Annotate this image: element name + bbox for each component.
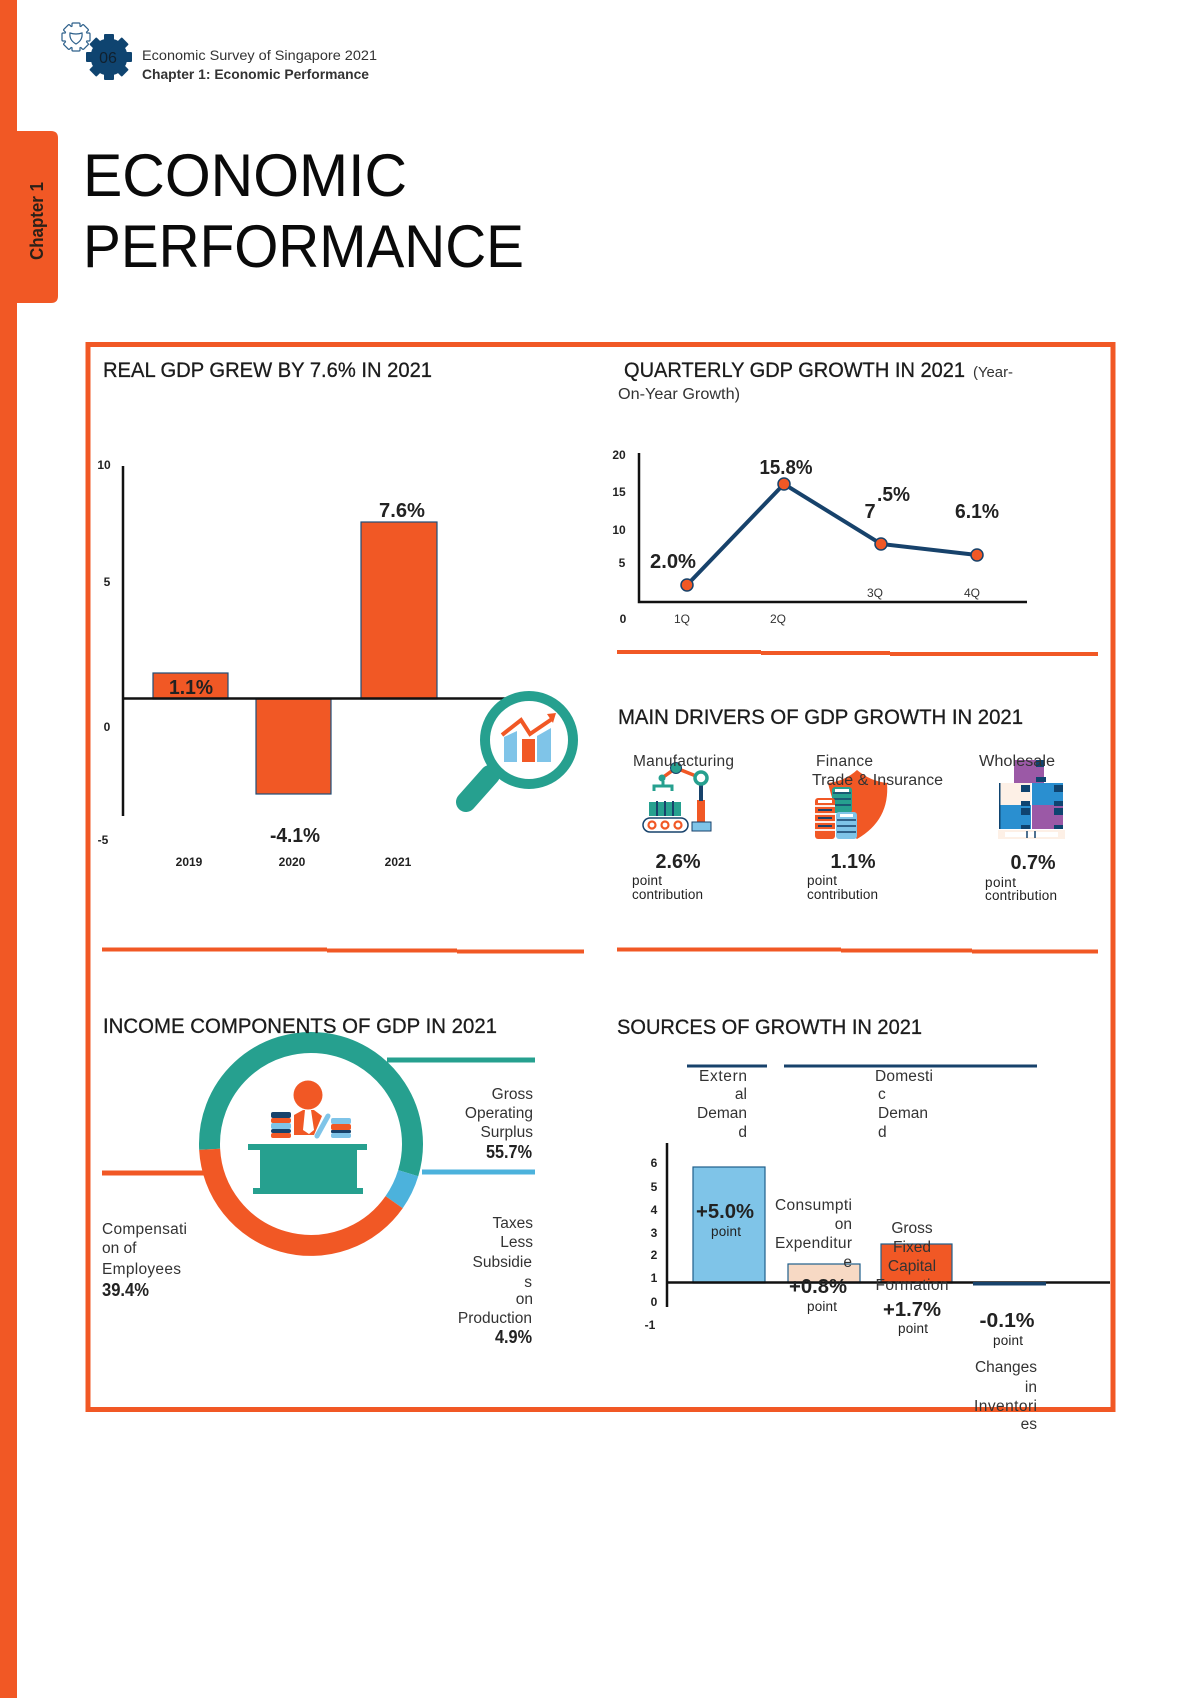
driver: finance and insurance: contribution	[807, 887, 878, 902]
panel: main drivers	[618, 706, 1065, 903]
line chart: quarterly growth: 7	[864, 501, 876, 523]
icon: stacked boxes on pallet	[998, 760, 1065, 839]
icon: gears with chapter number	[62, 23, 132, 80]
line chart: quarterly growth: 2.0%	[650, 551, 696, 573]
heading: income components: INCOME COMPONENTS OF GDP IN 2021	[103, 1015, 497, 1038]
line chart: quarterly growth: .5%	[877, 484, 910, 506]
label: gross operating surplus	[465, 1086, 533, 1162]
line chart: quarterly growth: 3Q	[867, 586, 883, 600]
panel: quarterly GDP	[612, 359, 1027, 626]
bar chart: annual GDP growth: 7.6%	[379, 500, 425, 522]
header text	[142, 47, 377, 82]
label: changes in inventories: -0.1%	[980, 1310, 1035, 1332]
chapter tab: Chapter 1	[27, 182, 47, 260]
label: taxes less subsidies: Less	[500, 1234, 533, 1251]
bar chart: annual GDP growth: -5	[98, 833, 109, 847]
bar chart: annual GDP growth: 2020	[279, 855, 306, 869]
bar chart: annual GDP growth: 0	[104, 720, 111, 734]
value: external demand: point	[711, 1224, 741, 1239]
label: consumption expenditure: +0.8%	[789, 1276, 847, 1298]
icon: magnifying glass with chart	[466, 696, 573, 802]
group label: external demand: al	[735, 1086, 747, 1103]
label: changes in inventories: point	[993, 1333, 1023, 1348]
value: external demand	[696, 1201, 754, 1239]
driver: wholesale: Wholesale	[979, 753, 1055, 770]
label: changes in inventories: in	[1025, 1379, 1037, 1396]
value: external demand: +5.0%	[696, 1201, 754, 1223]
line chart: quarterly growth: 15	[612, 485, 626, 499]
driver: wholesale: 0.7%	[1010, 852, 1056, 874]
bar chart: growth sources: 3	[651, 1226, 658, 1240]
driver: manufacturing: 2.6%	[656, 851, 701, 873]
group label: domestic demand: d	[878, 1124, 887, 1141]
heading: sources of growth: SOURCES OF GROWTH IN 2021	[617, 1016, 922, 1039]
divider right top	[617, 650, 1098, 656]
label: taxes less subsidies: 4.9%	[495, 1327, 532, 1347]
panel: real GDP	[97, 359, 573, 869]
line chart: quarterly growth: 4Q	[964, 586, 980, 600]
label: consumption expenditure: Expenditur	[775, 1235, 852, 1252]
driver: finance and insurance: Finance	[816, 753, 873, 770]
header text: Economic Survey of Singapore 2021	[142, 47, 377, 63]
divider left top	[102, 948, 584, 954]
label: compensation of employees: Compensati	[102, 1221, 187, 1238]
label: changes in inventories: es	[1021, 1416, 1037, 1433]
bar chart: annual GDP growth: 1.1%	[169, 677, 213, 699]
title: PERFORMANCE	[83, 213, 524, 280]
label: taxes less subsidies: on	[516, 1291, 533, 1308]
label: consumption expenditure: on	[835, 1216, 852, 1233]
label: gross fixed capital formation: Formation	[876, 1277, 948, 1294]
label: gross fixed capital formation: Capital	[888, 1258, 936, 1275]
icon: person at desk	[248, 1080, 367, 1194]
title	[83, 142, 524, 280]
orange sidebar	[0, 0, 17, 1698]
label: consumption expenditure	[775, 1197, 852, 1314]
label: compensation of employees	[102, 1221, 187, 1300]
bar chart: growth sources: 1	[651, 1271, 658, 1285]
label: consumption expenditure: Consumpti	[775, 1197, 852, 1214]
label: changes in inventories: Inventori	[974, 1398, 1037, 1415]
label: consumption expenditure: e	[843, 1254, 852, 1271]
label: compensation of employees: Employees	[102, 1261, 181, 1278]
leader lines	[102, 1058, 535, 1176]
line chart: quarterly growth: 1Q	[674, 612, 690, 626]
bar chart: growth sources: -1	[645, 1318, 656, 1332]
driver: manufacturing: contribution	[632, 887, 703, 902]
icon: factory robot arm	[643, 762, 711, 832]
bar chart: growth sources: 5	[651, 1180, 658, 1194]
label: taxes less subsidies: s	[524, 1274, 532, 1291]
bar chart: growth sources: 2	[651, 1248, 658, 1262]
panel: sources of growth	[617, 1016, 1110, 1433]
group label: external demand: d	[738, 1124, 747, 1141]
label: taxes less subsidies: Production	[458, 1310, 532, 1327]
driver: finance and insurance: 1.1%	[830, 851, 876, 873]
bar chart: annual GDP growth: -4.1%	[270, 825, 320, 847]
driver: wholesale: contribution	[985, 888, 1057, 903]
bar chart: annual GDP growth: 2019	[176, 855, 203, 869]
label: gross operating surplus: 55.7%	[486, 1142, 532, 1162]
bar chart: annual GDP growth	[97, 458, 510, 869]
bar chart: growth sources: 6	[651, 1156, 658, 1170]
heading: main drivers: MAIN DRIVERS OF GDP GROWTH IN 2021	[618, 706, 1023, 729]
driver: manufacturing: point	[632, 873, 662, 888]
heading: quarterly GDP: (Year-	[973, 365, 1013, 381]
group label: external demand: Extern	[699, 1068, 747, 1085]
label: gross operating surplus: Surplus	[480, 1124, 533, 1141]
panel frame	[88, 344, 1113, 1410]
bar chart: annual GDP growth: 10	[97, 458, 111, 472]
label: consumption expenditure: point	[807, 1299, 837, 1314]
title: ECONOMIC	[83, 142, 407, 209]
label: gross fixed capital formation: Gross	[891, 1220, 933, 1237]
line chart: quarterly growth: 15.8%	[760, 457, 813, 479]
driver: finance and insurance	[807, 753, 943, 902]
label: taxes less subsidies	[458, 1215, 533, 1347]
bar chart: growth sources: 4	[651, 1203, 658, 1217]
icon: gears with chapter number: 06	[99, 50, 117, 67]
line chart: quarterly growth: 10	[612, 523, 626, 537]
label: taxes less subsidies: Subsidie	[473, 1254, 532, 1271]
line chart: quarterly growth	[612, 448, 1027, 626]
bar chart: annual GDP growth: 2021	[385, 855, 412, 869]
heading: quarterly GDP	[618, 359, 1013, 403]
donut chart: income shares	[209, 1042, 412, 1245]
chapter tab	[0, 131, 58, 303]
line chart: quarterly growth: 2Q	[770, 612, 786, 626]
group label: external demand	[687, 1064, 767, 1141]
label: gross fixed capital formation: Fixed	[893, 1239, 931, 1256]
driver: wholesale: point	[985, 875, 1016, 890]
line chart: quarterly growth: 6.1%	[955, 501, 999, 523]
line chart: quarterly growth: 0	[620, 612, 627, 626]
heading: quarterly GDP: QUARTERLY GDP GROWTH IN 2021	[624, 359, 965, 382]
divider right middle	[617, 948, 1098, 954]
bar chart: annual GDP growth: 5	[104, 575, 111, 589]
heading: real GDP: REAL GDP GREW BY 7.6% IN 2021	[103, 359, 432, 382]
group label: domestic demand	[784, 1064, 1037, 1141]
group label: external demand: Deman	[697, 1105, 747, 1122]
label: compensation of employees: 39.4%	[102, 1280, 149, 1300]
driver: manufacturing	[632, 753, 734, 902]
label: gross fixed capital formation: point	[898, 1321, 928, 1336]
driver: wholesale	[979, 753, 1057, 903]
line chart: quarterly growth: 5	[619, 556, 626, 570]
group label: domestic demand: Domesti	[875, 1068, 933, 1085]
driver: finance and insurance: Trade & Insurance	[812, 772, 943, 789]
panel: income components	[102, 1015, 535, 1347]
label: gross fixed capital formation: +1.7%	[883, 1299, 941, 1321]
line chart: quarterly growth: 20	[612, 448, 626, 462]
label: changes in inventories	[974, 1310, 1037, 1433]
bar chart: growth sources: 0	[651, 1295, 658, 1309]
group label: domestic demand: c	[878, 1086, 886, 1103]
driver: finance and insurance: point	[807, 873, 837, 888]
bar chart: growth sources	[645, 1143, 1110, 1332]
heading: quarterly GDP: On-Year Growth)	[618, 386, 740, 403]
icon: shield and coin stacks	[815, 770, 887, 839]
label: taxes less subsidies: Taxes	[492, 1215, 533, 1232]
label: gross operating surplus: Gross	[492, 1086, 533, 1103]
label: compensation of employees: on of	[102, 1240, 137, 1257]
header text: Chapter 1: Economic Performance	[142, 66, 369, 82]
group label: domestic demand: Deman	[878, 1105, 928, 1122]
label: changes in inventories: Changes	[975, 1359, 1037, 1376]
label: gross fixed capital formation	[876, 1220, 948, 1336]
driver: manufacturing: Manufacturing	[633, 753, 734, 770]
label: gross operating surplus: Operating	[465, 1105, 533, 1122]
